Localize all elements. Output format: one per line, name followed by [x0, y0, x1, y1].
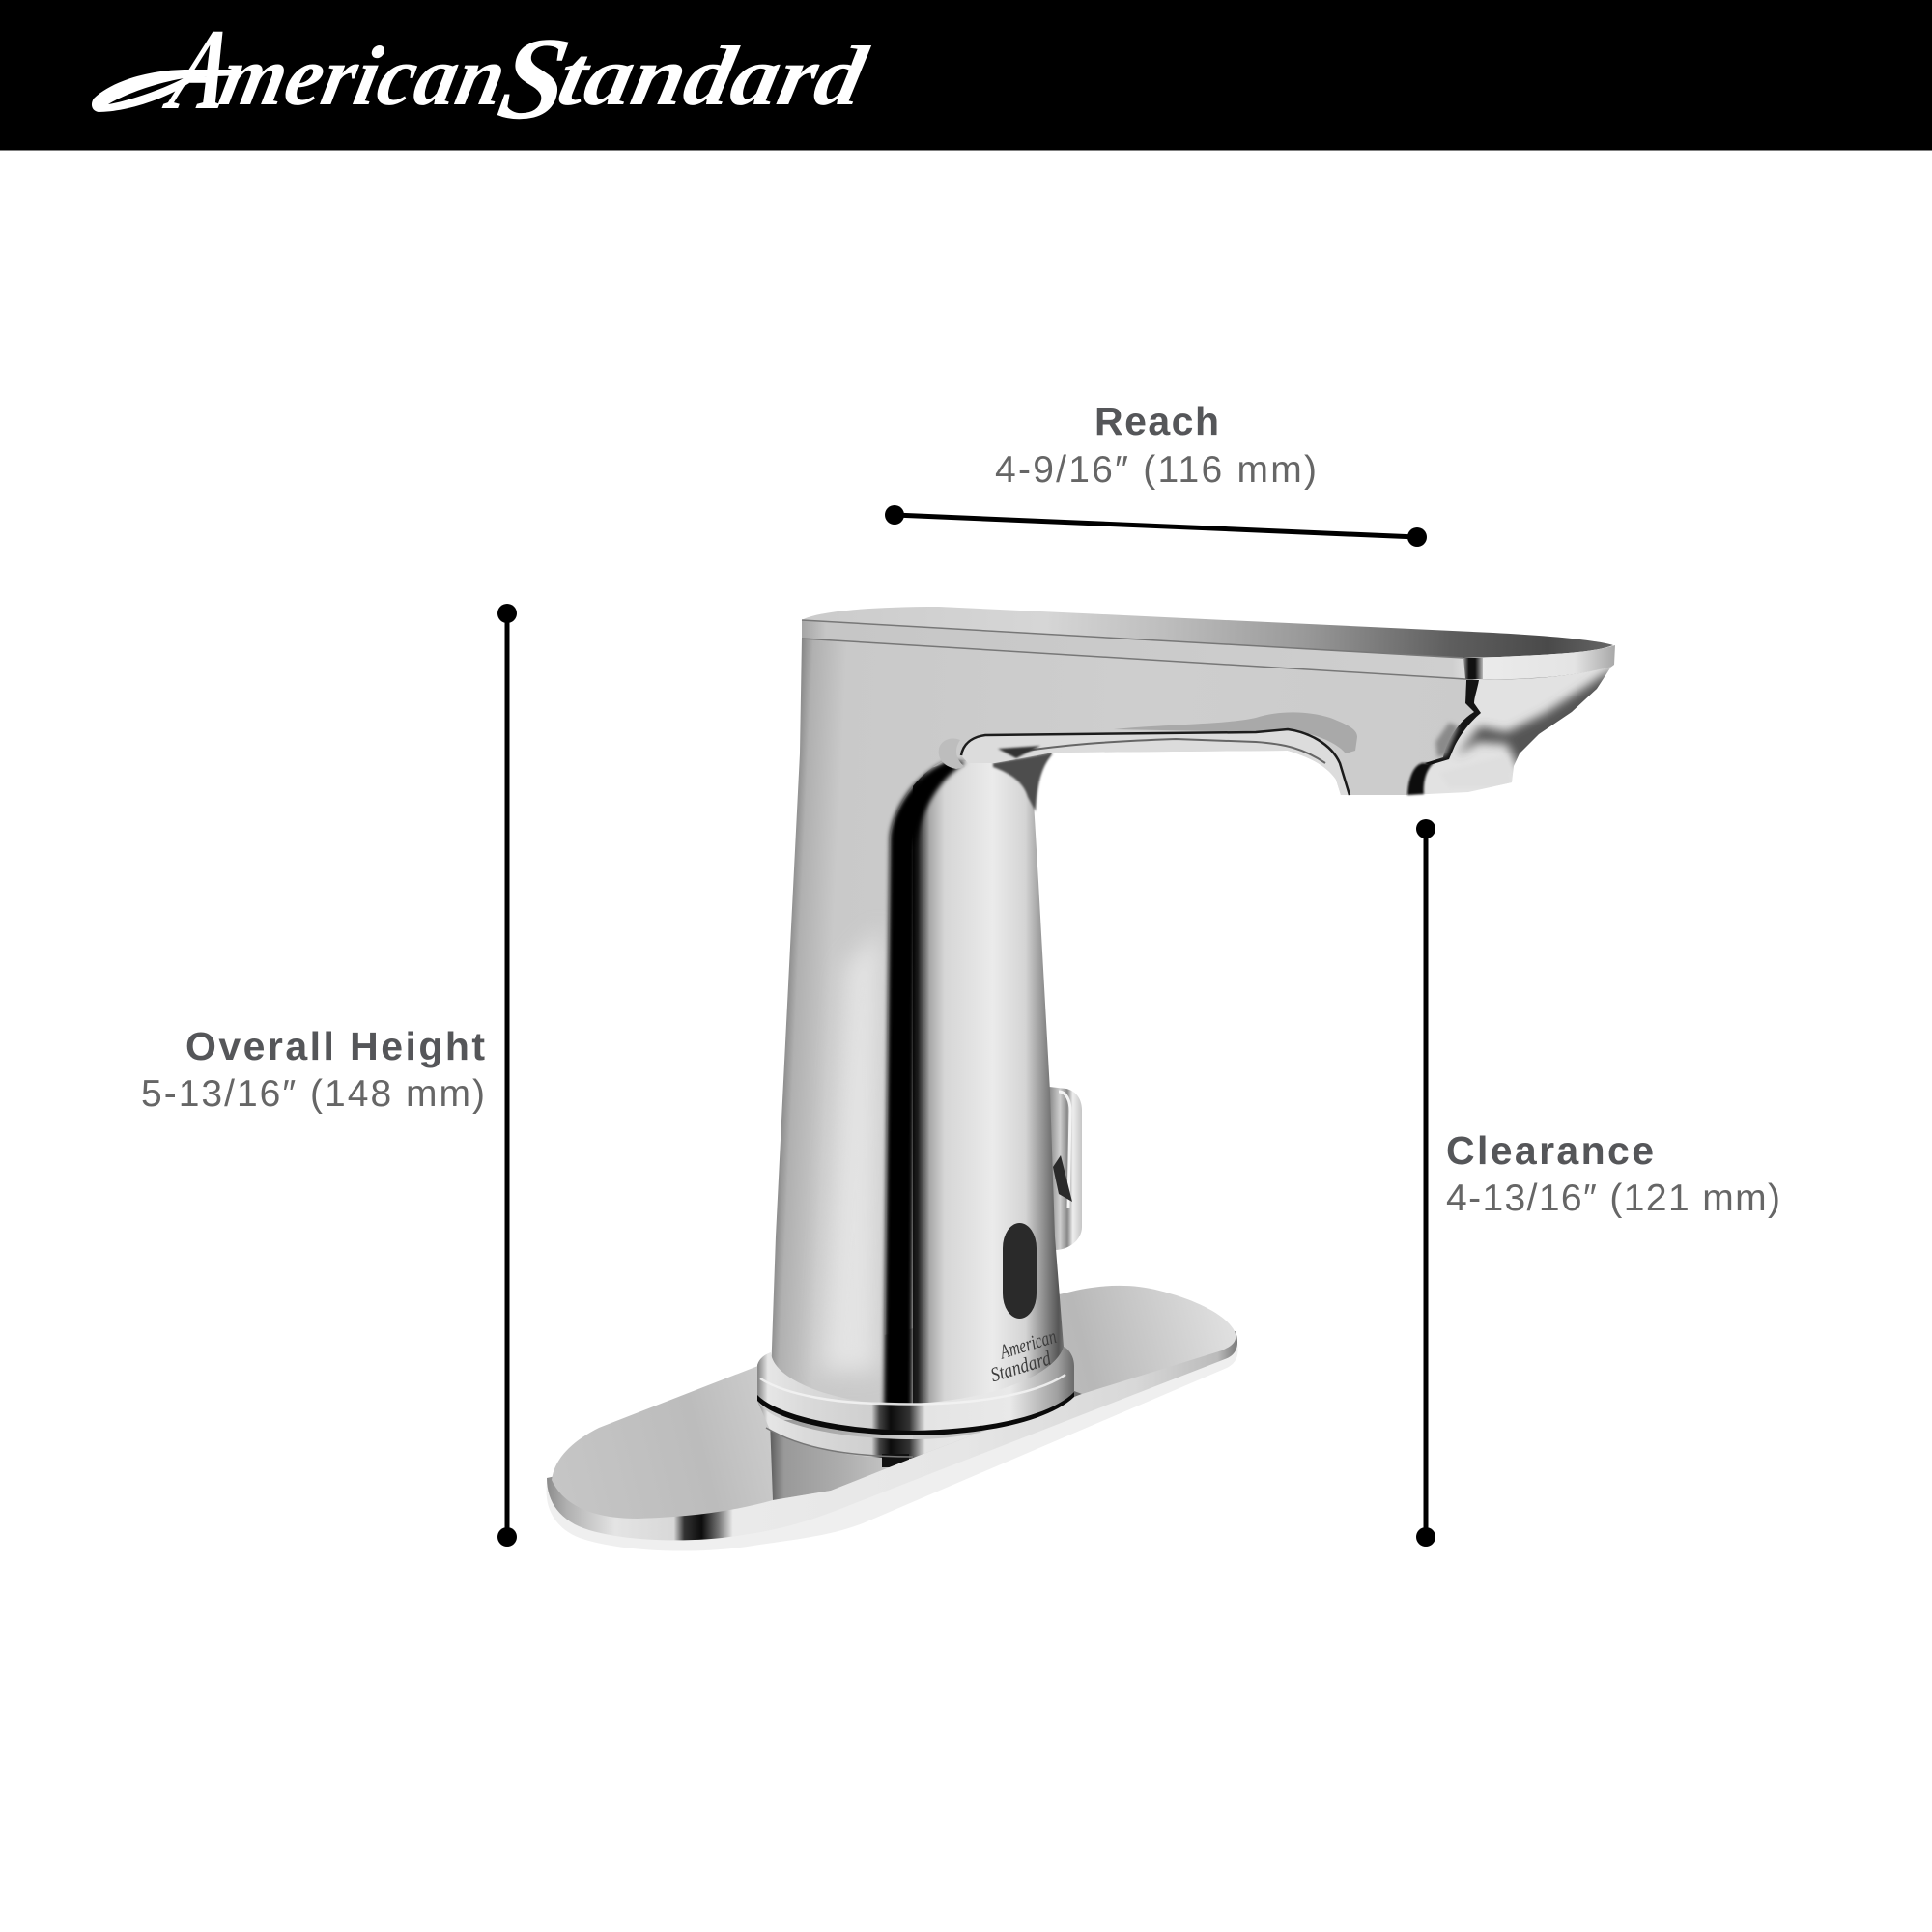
arm junction	[939, 738, 965, 769]
label: overall height: 5-13/16″ (148 mm)	[141, 1073, 485, 1115]
collar	[757, 1347, 1074, 1435]
spout details	[802, 607, 1615, 795]
sensor window	[1003, 1223, 1037, 1319]
spout rim band	[802, 620, 1615, 680]
header bar	[0, 0, 1932, 151]
label: overall height	[141, 1024, 485, 1115]
logo: American Standard: S	[490, 13, 579, 144]
rim lines	[802, 620, 1610, 680]
label: clearance	[1446, 1128, 1780, 1219]
spout front face and left column panel	[771, 638, 1480, 1408]
nozzle dark reflection	[1407, 763, 1434, 795]
faucet	[547, 607, 1615, 1551]
lever handle	[1049, 1087, 1082, 1250]
label: reach: 4-9/16″ (116 mm)	[995, 449, 1317, 491]
column logo: American	[996, 1324, 1059, 1364]
label: clearance: 4-13/16″ (121 mm)	[1446, 1178, 1780, 1219]
logo: American Standard: A	[155, 6, 247, 134]
notch	[1463, 658, 1483, 679]
arm chrome band	[961, 729, 1350, 795]
label: reach	[995, 399, 1317, 491]
deck plate	[547, 1286, 1238, 1551]
column logo: Standard	[987, 1346, 1054, 1386]
column right section	[913, 753, 1064, 1410]
logo: American Standard: merican	[213, 30, 514, 124]
label: overall height: Overall Height	[185, 1024, 485, 1068]
plate reflection of column	[757, 1391, 1082, 1500]
label: reach: Reach	[1094, 399, 1219, 443]
spout top surface	[802, 607, 1613, 658]
arm shading blob	[1114, 712, 1357, 753]
column logo	[982, 1324, 1065, 1386]
line: overall height	[497, 604, 517, 1547]
label: clearance: Clearance	[1446, 1128, 1654, 1173]
logo: American Standard: tandard	[551, 30, 875, 124]
dimension: clearance	[1416, 819, 1780, 1547]
dimension: reach	[885, 399, 1427, 547]
nozzle	[1407, 667, 1611, 795]
line: clearance	[1416, 819, 1435, 1547]
dimension: overall height	[141, 604, 517, 1547]
shadow under arm	[993, 753, 1053, 811]
logo: American Standard	[92, 6, 875, 144]
soft highlight on column left panel	[821, 927, 881, 1372]
line: reach	[885, 505, 1427, 547]
dark arch band	[884, 760, 966, 1410]
